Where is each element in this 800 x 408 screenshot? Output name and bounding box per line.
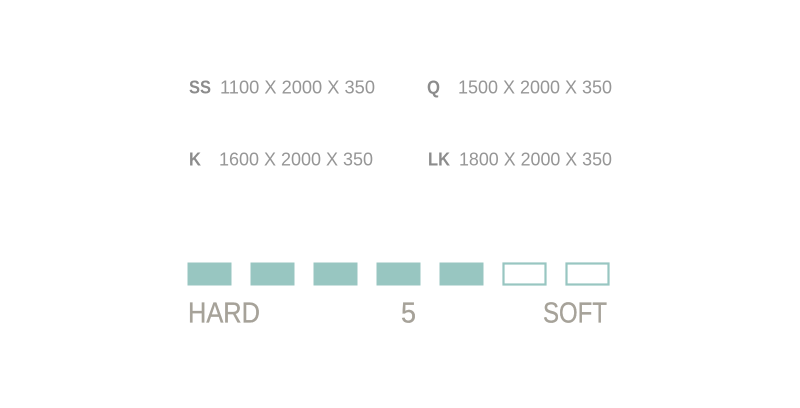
firmness labels: 5	[401, 298, 416, 330]
firmness scale boxes	[188, 262, 608, 286]
size SS: 1100 X 2000 X 350	[220, 76, 375, 98]
firmness labels: SOFT	[543, 298, 607, 330]
panel: mattress sizes	[189, 76, 612, 170]
size Q: Q	[427, 76, 440, 98]
size K: K	[189, 148, 202, 170]
firmness labels	[188, 298, 607, 330]
size K: 1600 X 2000 X 350	[219, 148, 373, 170]
size Q: 1500 X 2000 X 350	[458, 76, 612, 98]
firmness labels: HARD	[188, 298, 260, 330]
size LK: 1800 X 2000 X 350	[459, 148, 612, 170]
size LK: LK	[428, 148, 451, 170]
size SS: SS	[189, 76, 211, 98]
